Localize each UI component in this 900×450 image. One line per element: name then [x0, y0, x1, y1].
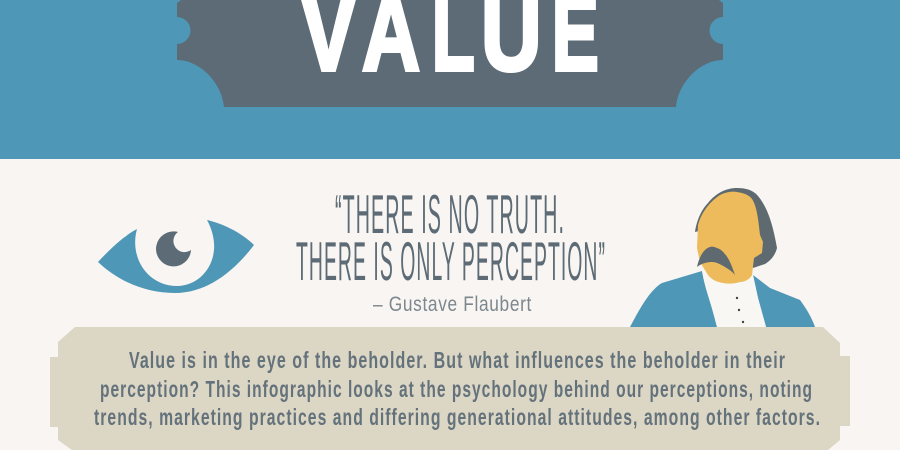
panel: introduction	[50, 327, 850, 450]
illustration: Gustave Flaubert	[630, 188, 815, 327]
title	[301, 0, 599, 93]
header banner	[0, 0, 900, 159]
introduction text	[94, 347, 821, 430]
title ticket	[177, 0, 723, 107]
quote attribution: – Gustave Flaubert	[373, 293, 532, 316]
icon: eye	[98, 220, 254, 293]
quote	[296, 183, 606, 316]
